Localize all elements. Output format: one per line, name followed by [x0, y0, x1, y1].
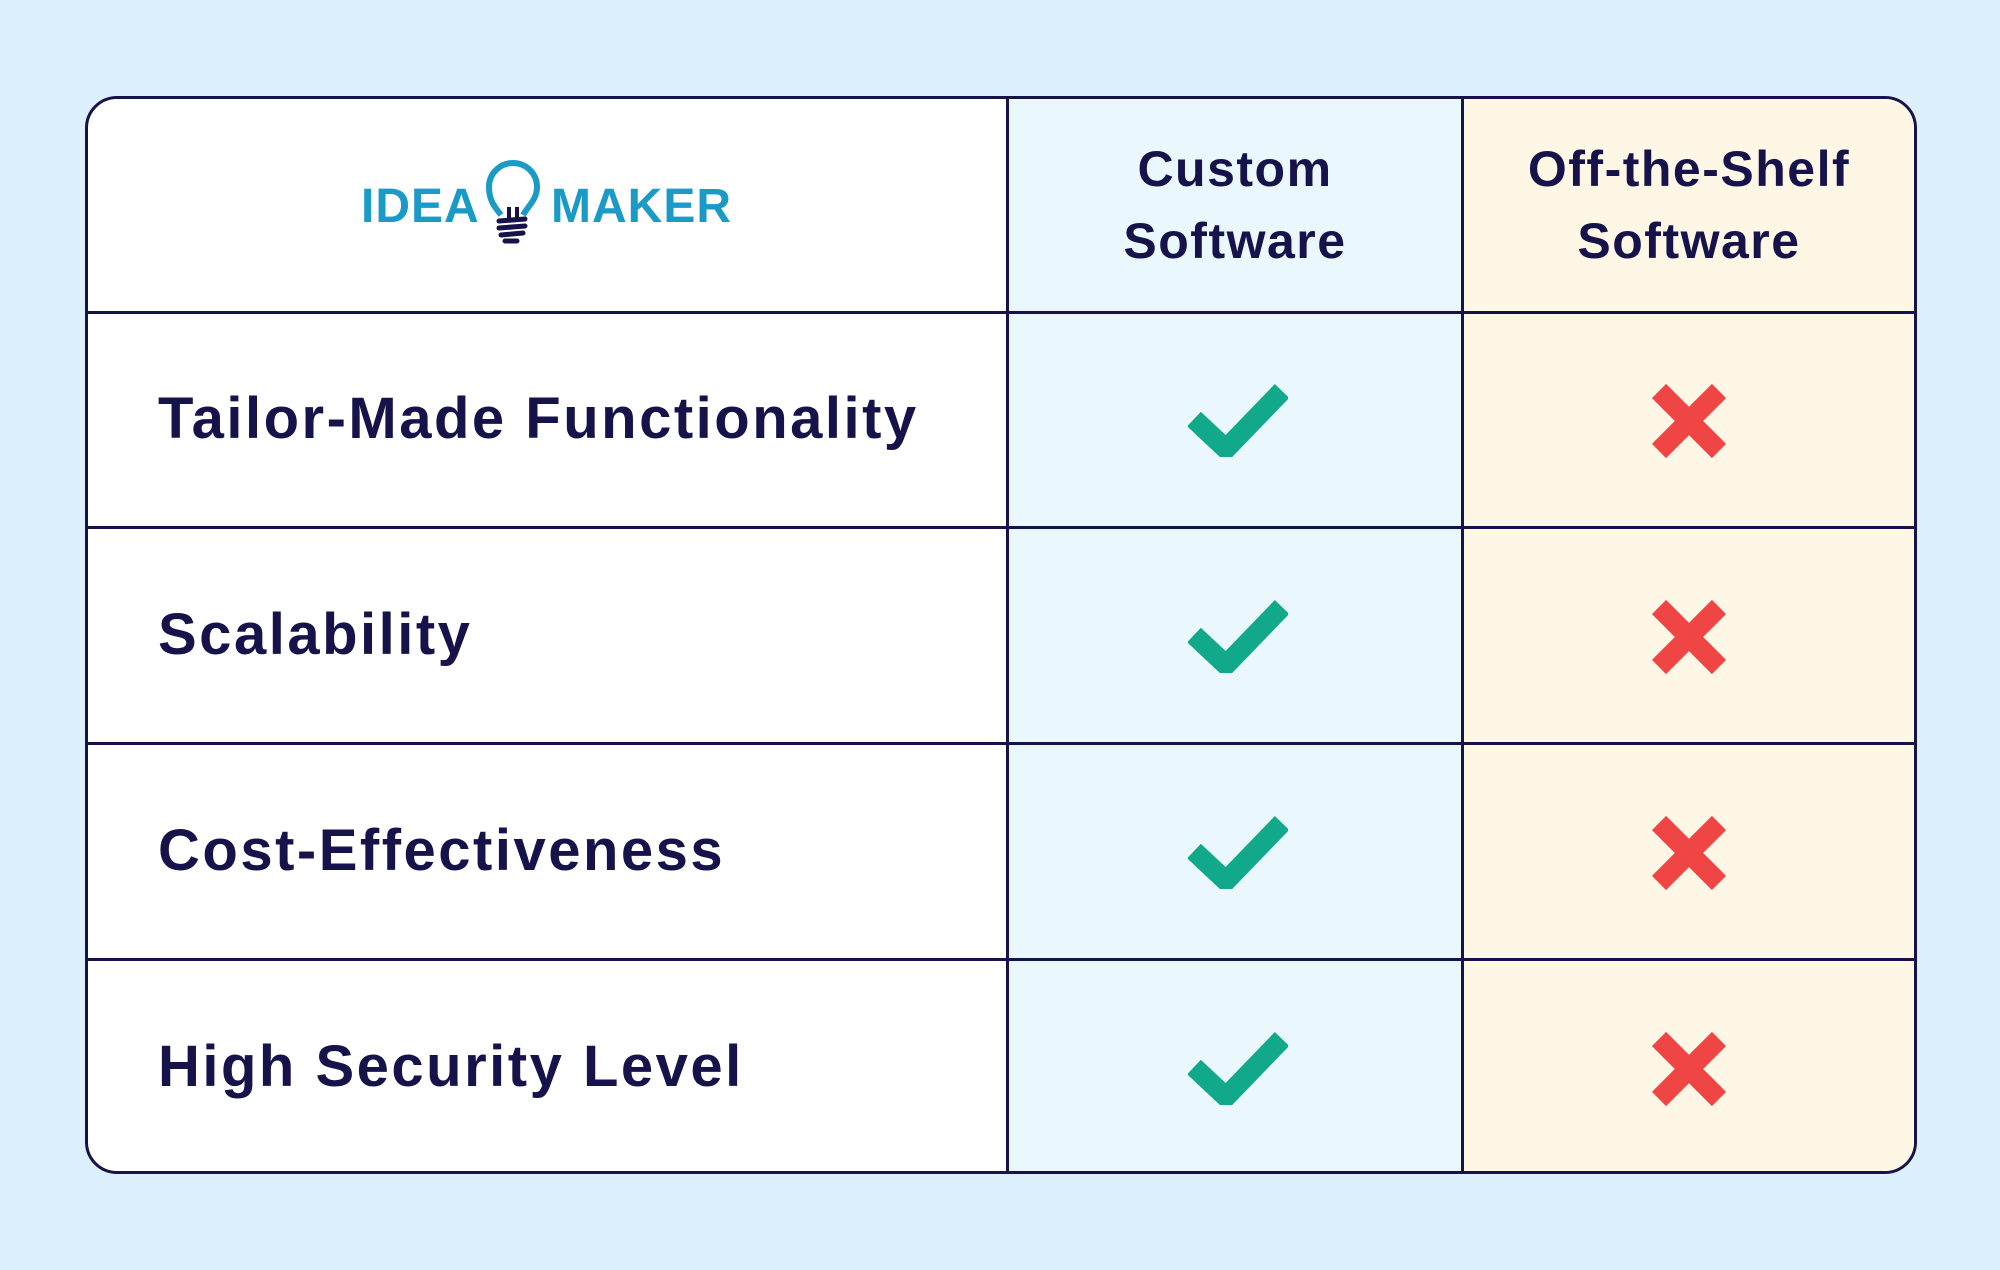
logo: Idea Maker: IDEA: [361, 180, 480, 233]
header: off-the-shelf software: Software: [1577, 213, 1801, 269]
header: off-the-shelf software: Off-the-Shelf: [1528, 141, 1850, 197]
header: custom software: Software: [1123, 213, 1347, 269]
header: custom software: [1123, 141, 1347, 269]
checks column: [1188, 384, 1288, 1105]
crosses column: [1652, 384, 1726, 1106]
row label: cost: Cost-Effectiveness: [158, 818, 725, 883]
row label: scalability: Scalability: [158, 602, 472, 667]
logo: Idea Maker: MAKER: [551, 180, 732, 233]
header: custom software: Custom: [1137, 141, 1333, 197]
row label: security: High Security Level: [158, 1034, 744, 1099]
row label: tailor-made: Tailor-Made Functionality: [158, 386, 919, 451]
header: off-the-shelf software: [1528, 141, 1850, 269]
comparison table: [85, 96, 1917, 1174]
logo: Idea Maker: [361, 160, 732, 244]
